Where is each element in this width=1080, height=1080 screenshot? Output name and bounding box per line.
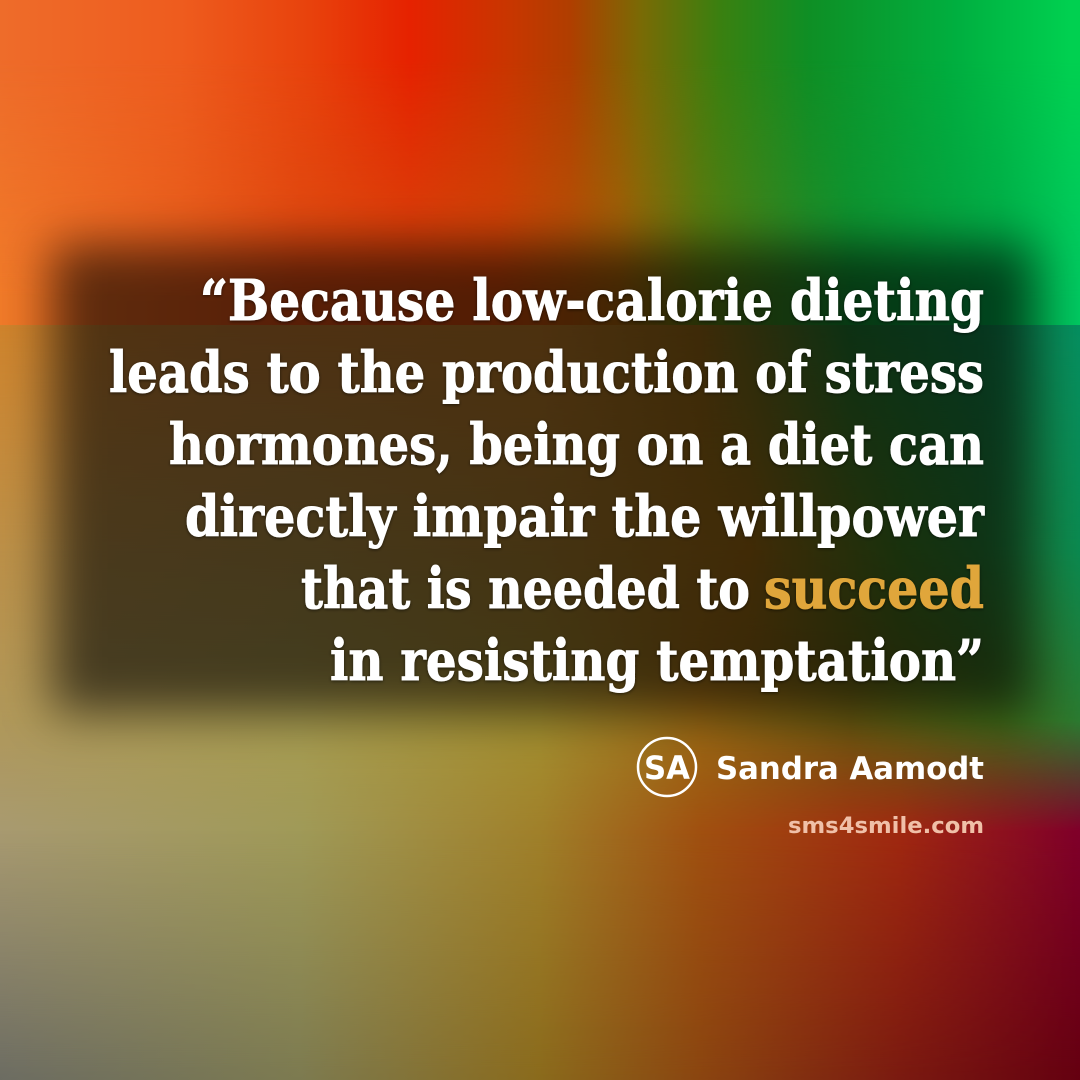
quote text: [109, 268, 985, 694]
quote text: that is needed to: [301, 556, 750, 622]
author badge: SA monogram: SA: [644, 749, 690, 787]
background: top colour field: [0, 0, 1080, 325]
quote text: directly impair the willpower: [185, 484, 985, 550]
author badge: SA monogram: [638, 738, 696, 796]
highlighted word: succeed: [764, 556, 984, 622]
background: lower colour field: [0, 325, 1080, 1080]
dark text panel: [52, 245, 1034, 713]
quote text: in resisting temptation”: [330, 628, 984, 694]
website: sms4smile.com: [788, 814, 984, 839]
author name: Sandra Aamodt: [716, 751, 984, 787]
quote text: “Because low-calorie dieting: [200, 268, 984, 334]
